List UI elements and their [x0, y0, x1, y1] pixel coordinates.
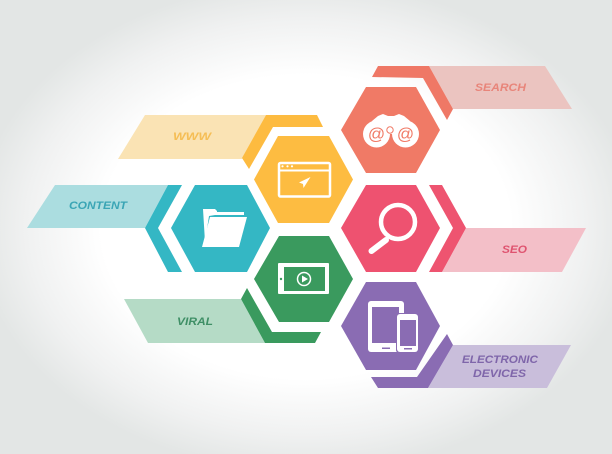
seo label ribbon — [442, 228, 586, 272]
content accent band — [145, 185, 182, 272]
content label: CONTENT — [69, 200, 128, 212]
viral label ribbon — [124, 299, 265, 343]
seo label: SEO — [502, 244, 527, 256]
seo accent band — [429, 185, 466, 272]
icon: folder — [202, 209, 247, 247]
panel: search — [341, 66, 572, 173]
www label ribbon — [118, 115, 266, 159]
www label: WWW — [173, 131, 213, 143]
icon: magnifying glass — [372, 205, 415, 251]
panel: electronic devices — [341, 282, 571, 388]
viral hexagon — [254, 236, 353, 322]
content hexagon — [171, 185, 270, 272]
content label ribbon — [27, 185, 168, 228]
electronic devices hexagon — [341, 282, 440, 370]
search accent band — [372, 66, 453, 120]
search label: SEARCH — [475, 82, 527, 94]
electronic devices label: ELECTRONIC — [462, 354, 539, 366]
viral accent band — [241, 288, 321, 343]
www accent band — [242, 115, 323, 169]
icon: browser window — [279, 163, 330, 196]
icon: binoculars with at signs: @ — [368, 124, 385, 144]
electronic devices label: DEVICES — [473, 368, 527, 380]
icon: binoculars with at signs — [363, 114, 419, 148]
panel: content — [27, 185, 270, 272]
icon: binoculars with at signs: @ — [397, 124, 414, 144]
viral label: VIRAL — [177, 316, 213, 328]
panel: www — [118, 115, 353, 223]
icon: tablet and phone — [368, 301, 419, 353]
electronic devices accent band — [371, 334, 453, 388]
search hexagon — [341, 87, 440, 173]
panel: seo — [341, 185, 586, 272]
seo hexagon — [341, 185, 440, 272]
panel: viral — [124, 236, 353, 343]
icon: video tablet — [278, 263, 329, 294]
www hexagon — [254, 136, 353, 223]
search label ribbon — [429, 66, 572, 109]
electronic devices label ribbon — [428, 345, 571, 388]
